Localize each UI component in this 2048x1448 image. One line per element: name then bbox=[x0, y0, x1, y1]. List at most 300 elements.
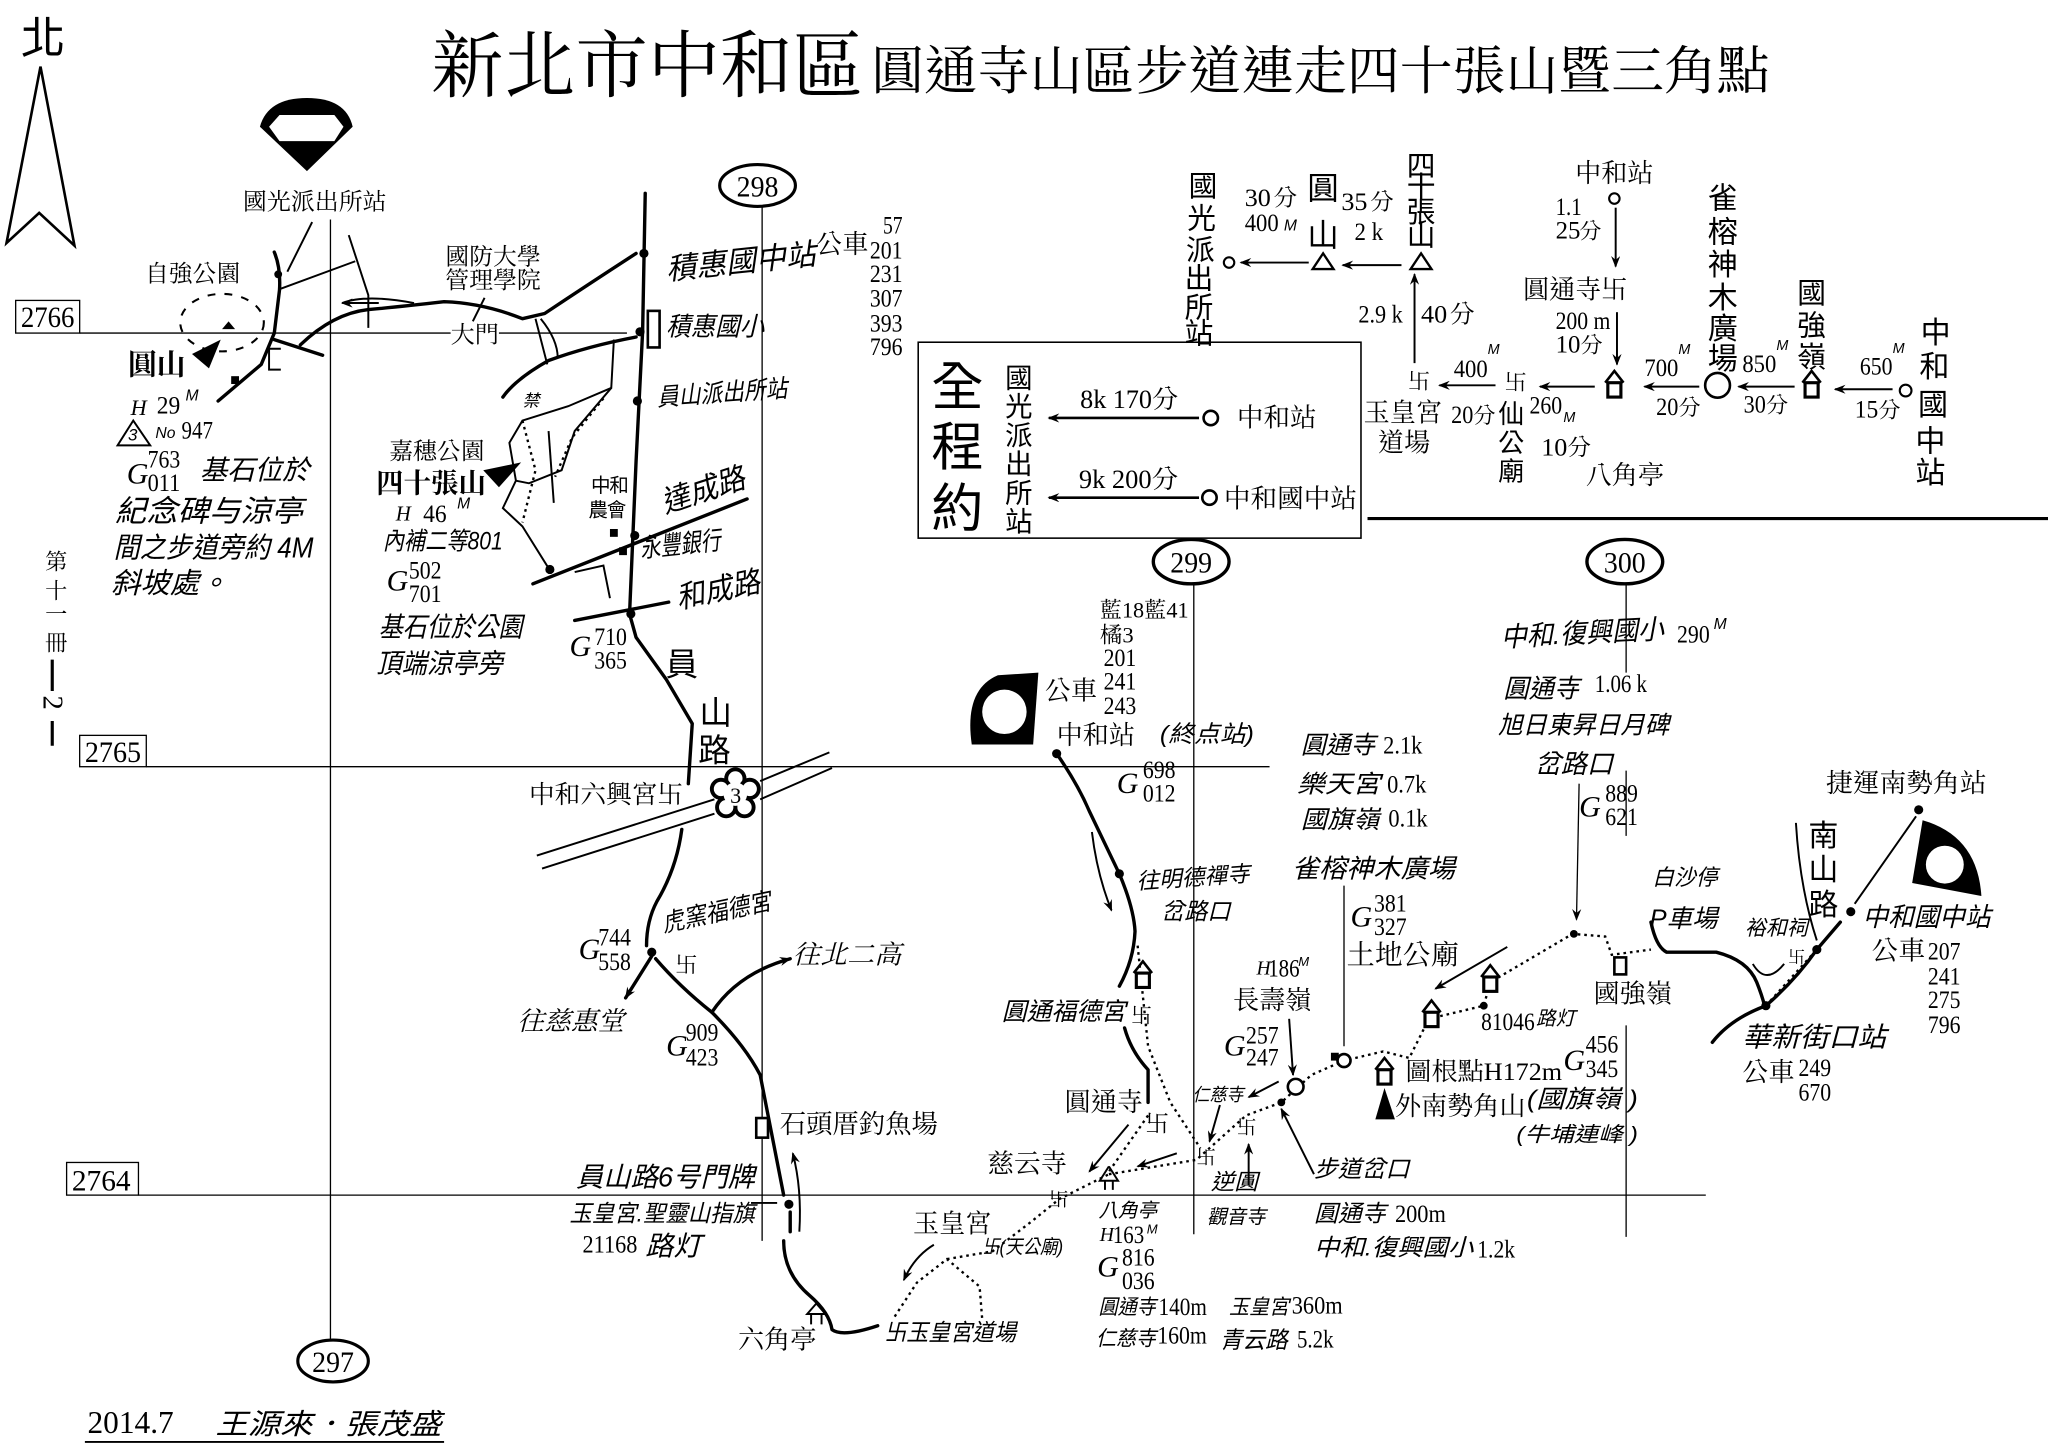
bus routes at Zhonghe station: 藍18藍41 bbox=[1100, 597, 1189, 622]
panel: route flow diagram: 國 bbox=[1189, 171, 1217, 203]
panel: total walking time box: 出 bbox=[1005, 448, 1032, 479]
panel: route flow diagram: 站 bbox=[1915, 456, 1945, 489]
panel: route flow diagram: 分 bbox=[1273, 185, 1297, 212]
labels: Fuxing elementary school approach: 621 bbox=[1605, 804, 1638, 831]
peak: Yuanshan with triangulation notes bbox=[111, 340, 314, 600]
labels: Nanshijiao area: 公車 bbox=[1872, 936, 1925, 965]
road labels, south-west section: 虎窯福德宮 bbox=[659, 887, 776, 938]
labels along the ridge trail: G bbox=[1224, 1030, 1246, 1063]
credits: date and authors: 2014.7 bbox=[88, 1405, 174, 1440]
panel: route flow diagram: 10 bbox=[1541, 435, 1567, 462]
route: Yuanshan Road north-south bbox=[503, 193, 747, 946]
panel: route flow diagram: 200 m bbox=[1556, 308, 1610, 335]
labels along the ridge trail: 186 bbox=[1268, 956, 1300, 983]
panel: route flow diagram: 分 bbox=[1473, 403, 1495, 428]
labels: Fuxing elementary school approach: 290 bbox=[1677, 621, 1710, 648]
panel: route flow diagram: 分 bbox=[1878, 398, 1900, 423]
road labels, north section: G bbox=[569, 630, 591, 663]
panel: route flow diagram: 400 bbox=[1454, 356, 1488, 383]
panel: route flow diagram: 張 bbox=[1407, 197, 1435, 229]
panel: route flow diagram: 光 bbox=[1187, 203, 1216, 235]
panel: total walking time box: 全 bbox=[931, 359, 984, 417]
panel: total walking time box: 派 bbox=[1005, 419, 1032, 450]
panel: route flow diagram: 中 bbox=[1921, 317, 1951, 350]
label: National Defense University college: 管理學院 bbox=[445, 267, 541, 294]
labels along the ridge trail: 81046 bbox=[1481, 1009, 1535, 1036]
side volume label: 第 bbox=[45, 549, 67, 574]
road labels, north section: 會 bbox=[607, 500, 627, 522]
label: National Defense University college bbox=[445, 243, 541, 294]
road labels, north section: 積惠國中站 bbox=[664, 238, 821, 287]
octagonal pavilion notes: G bbox=[1097, 1250, 1119, 1283]
labels along the ridge trail: 圓通寺 bbox=[1314, 1200, 1389, 1226]
grid lines with coordinate labels: 2766 bbox=[21, 301, 74, 334]
route: Baishating car park to Nanshijiao bbox=[1651, 805, 1923, 1042]
panel: route flow diagram: 分 bbox=[1370, 188, 1394, 215]
panel: route flow diagram bbox=[1185, 151, 2048, 519]
labels: Nanshijiao area: 路 bbox=[1808, 889, 1838, 922]
octagonal pavilion notes: 八角亭 bbox=[1098, 1200, 1161, 1222]
panel: route flow diagram: 分 bbox=[1579, 219, 1601, 244]
octagonal pavilion notes: 163 bbox=[1113, 1222, 1144, 1249]
peak: Yuanshan with triangulation notes: No bbox=[155, 425, 176, 442]
panel: total walking time box: 所 bbox=[1005, 477, 1032, 508]
bus routes at Zhonghe station: 698 bbox=[1143, 757, 1176, 784]
panel: route flow diagram: 派 bbox=[1186, 235, 1215, 267]
peak: Yuanshan with triangulation notes: 紀念碑与涼亭 bbox=[115, 496, 307, 529]
panel: total walking time box: 程 bbox=[931, 419, 984, 477]
road labels, south-west section: 往北二高 bbox=[793, 940, 905, 969]
panel: route flow diagram: 雀 bbox=[1708, 182, 1738, 215]
labels: Nanshijiao area: 249 bbox=[1799, 1055, 1831, 1082]
side volume label: 十 bbox=[45, 578, 67, 603]
labels along the ridge trail: 圖根點H172m bbox=[1405, 1058, 1562, 1086]
labels: Nanshijiao area: 796 bbox=[1928, 1012, 1960, 1039]
road labels, north section: 231 bbox=[870, 261, 903, 288]
peak: Yuanshan with triangulation notes: G bbox=[127, 458, 149, 491]
panel: route flow diagram: 30 bbox=[1744, 391, 1766, 418]
road labels, north section: 中 bbox=[591, 475, 611, 497]
labels along the ridge trail: 中和.復興國小 bbox=[1314, 1234, 1474, 1260]
panel: route flow diagram: 分 bbox=[1678, 395, 1701, 420]
bus routes at Zhonghe station: (終点站) bbox=[1160, 721, 1254, 747]
peak: Sishizhangshan with triangulation notes: 701 bbox=[409, 581, 441, 608]
bus routes at Zhonghe station: 岔路口 bbox=[1161, 899, 1232, 925]
road labels, north section: 達成路 bbox=[657, 461, 752, 520]
panel: route flow diagram: M bbox=[1284, 217, 1298, 234]
road labels, south-west section: 石頭厝釣魚場 bbox=[780, 1110, 938, 1139]
labels along the ridge trail bbox=[1192, 732, 1638, 1263]
labels: Nanshijiao area bbox=[1650, 769, 1994, 1107]
labels: Fuxing elementary school approach: G bbox=[1579, 791, 1601, 824]
panel: route flow diagram: 國 bbox=[1918, 388, 1948, 421]
peak: Sishizhangshan with triangulation notes: 四十張山 bbox=[376, 468, 486, 498]
labels along the ridge trail: 247 bbox=[1246, 1044, 1279, 1071]
peak: Yuanshan with triangulation notes: 763 bbox=[148, 446, 180, 473]
labels along the ridge trail: 仁慈寺 bbox=[1192, 1084, 1246, 1105]
panel: route flow diagram: 20 bbox=[1656, 394, 1678, 421]
panel: route flow diagram: 850 bbox=[1742, 351, 1776, 378]
labels along the ridge trail: 0.1k bbox=[1388, 805, 1428, 832]
peak: Sishizhangshan with triangulation notes: 46 bbox=[423, 501, 447, 528]
labels: Nanshijiao area: 公車 bbox=[1742, 1058, 1795, 1087]
credits: date and authors: 王源來．張茂盛 bbox=[216, 1409, 445, 1441]
panel: route flow diagram: 20 bbox=[1451, 402, 1473, 429]
label: Zhonghe Liuxing Temple: 中和六興宮卐 bbox=[529, 781, 683, 809]
road labels, south-west section: 744 bbox=[598, 924, 631, 951]
labels along the ridge trail: 卐 bbox=[1237, 1117, 1256, 1139]
labels along the ridge trail: 雀榕神木廣場 bbox=[1292, 854, 1458, 884]
labels: Fuxing elementary school approach: 889 bbox=[1605, 781, 1638, 808]
labels along the ridge trail: 257 bbox=[1246, 1022, 1279, 1049]
icon: Nanshijiao MRT marker bbox=[1912, 820, 1981, 896]
panel: route flow diagram: 30 bbox=[1245, 185, 1271, 212]
bus routes at Zhonghe station bbox=[987, 597, 1254, 1211]
road labels, north section: 員山派出所站 bbox=[656, 376, 791, 412]
labels along the ridge trail: 觀音寺 bbox=[1207, 1206, 1269, 1228]
label: Ziqiang park: 自強公園 bbox=[145, 260, 240, 287]
panel: total walking time box: 8k 170分 bbox=[1080, 385, 1178, 414]
octagonal pavilion notes: 140m bbox=[1159, 1294, 1207, 1321]
road labels, north section: 農 bbox=[588, 500, 608, 522]
panel: route flow diagram: 四 bbox=[1407, 151, 1435, 183]
labels: Nanshijiao area: 670 bbox=[1799, 1080, 1831, 1107]
labels along the ridge trail: 逆圓 bbox=[1211, 1170, 1261, 1195]
bus routes at Zhonghe station: 卐 bbox=[1131, 1004, 1152, 1028]
panel: route flow diagram: 分 bbox=[1450, 300, 1475, 328]
title bbox=[431, 26, 1770, 107]
panel: route flow diagram: 八角亭 bbox=[1586, 461, 1664, 490]
road labels, north section: 山 bbox=[699, 693, 732, 730]
peak: Sishizhangshan with triangulation notes: M bbox=[457, 496, 471, 513]
peak: Sishizhangshan with triangulation notes bbox=[376, 438, 526, 679]
panel: route flow diagram: 分 bbox=[1567, 434, 1591, 461]
labels: Nanshijiao area: P車場 bbox=[1650, 906, 1721, 933]
panel: route flow diagram: 國 bbox=[1797, 278, 1826, 310]
bus routes at Zhonghe station: G bbox=[1117, 767, 1139, 800]
labels: Nanshijiao area: 275 bbox=[1928, 987, 1960, 1014]
panel: total walking time box: 國 bbox=[1005, 362, 1032, 393]
bus routes at Zhonghe station: 圓通福德宮 bbox=[1002, 999, 1129, 1026]
labels along the ridge trail: M bbox=[1298, 954, 1309, 969]
labels: Nanshijiao area: 中和國中站 bbox=[1863, 902, 1994, 932]
panel: route flow diagram: 25 bbox=[1556, 218, 1580, 245]
panel: total walking time box: 光 bbox=[1005, 391, 1032, 422]
road labels, south-west section: 玉皇宮 bbox=[913, 1209, 991, 1238]
grid lines with coordinate labels: 298 bbox=[737, 170, 778, 203]
panel: route flow diagram: 1.1 bbox=[1556, 194, 1582, 221]
bus routes at Zhonghe station: 201 bbox=[1104, 645, 1136, 672]
panel: total walking time box: 中和站 bbox=[1237, 403, 1317, 432]
panel: route flow diagram: 廣 bbox=[1708, 313, 1738, 346]
labels: Nanshijiao area: 裕和祠 bbox=[1745, 917, 1811, 940]
label: main gate: 大門 bbox=[451, 322, 499, 349]
road labels, south-west section: 路灯 bbox=[645, 1231, 706, 1262]
labels along the ridge trail: 456 bbox=[1586, 1031, 1618, 1058]
panel: route flow diagram: 分 bbox=[1580, 332, 1603, 357]
road labels, south-west section: G bbox=[666, 1030, 688, 1063]
bus routes at Zhonghe station: 241 bbox=[1104, 668, 1136, 695]
panel: route flow diagram: 中 bbox=[1915, 425, 1945, 458]
side volume label: 一 bbox=[45, 601, 67, 626]
peak: Sishizhangshan with triangulation notes: 嘉穗公園 bbox=[389, 438, 485, 465]
octagonal pavilion notes: 360m bbox=[1292, 1293, 1343, 1320]
octagonal pavilion notes: 036 bbox=[1122, 1268, 1155, 1295]
panel: route flow diagram: 仙 bbox=[1498, 399, 1524, 429]
labels: Nanshijiao area: 山 bbox=[1808, 853, 1838, 886]
route: Yuanshan Road south to Yuhuang temple bbox=[626, 948, 878, 1333]
labels along the ridge trail: 2.1k bbox=[1383, 732, 1423, 759]
panel: route flow diagram: 廟 bbox=[1498, 457, 1524, 487]
bus routes at Zhonghe station: 卐 bbox=[1049, 1189, 1068, 1211]
octagonal pavilion notes bbox=[1096, 1200, 1343, 1354]
octagonal pavilion notes: 圓通寺 bbox=[1098, 1296, 1159, 1319]
labels along the ridge trail: 路灯 bbox=[1536, 1008, 1579, 1030]
title: 新北市中和區 bbox=[431, 26, 865, 107]
panel: route flow diagram: 40 bbox=[1421, 301, 1447, 328]
road labels, north section: 393 bbox=[870, 310, 903, 337]
road labels, south-west section: 玉皇宮.聖靈山指旗 bbox=[569, 1200, 758, 1226]
octagonal pavilion notes: 青云路 bbox=[1220, 1327, 1290, 1353]
labels along the ridge trail: 381 bbox=[1374, 890, 1407, 917]
road labels, south-west section: 六角亭 bbox=[738, 1326, 816, 1355]
labels along the ridge trail: 國旗嶺 bbox=[1301, 807, 1383, 834]
panel: route flow diagram: 出 bbox=[1185, 264, 1213, 296]
road labels, north section: 和成路 bbox=[673, 565, 766, 616]
credits: date and authors bbox=[85, 1405, 445, 1442]
panel: route flow diagram: 10 bbox=[1556, 331, 1580, 358]
road labels, north section bbox=[569, 212, 903, 768]
road labels, north section: 201 bbox=[870, 237, 903, 264]
labels along the ridge trail: 200m bbox=[1395, 1201, 1446, 1228]
road labels, north section: 365 bbox=[594, 647, 627, 674]
peak: Yuanshan with triangulation notes: 3 bbox=[128, 425, 138, 444]
panel: route flow diagram: 圓 bbox=[1307, 171, 1339, 206]
peak: Yuanshan with triangulation notes: 947 bbox=[182, 418, 213, 445]
highway interchange: 3 bbox=[730, 783, 741, 808]
peak: Yuanshan with triangulation notes: 斜坡處。 bbox=[111, 568, 229, 600]
road labels, north section: 57 bbox=[883, 212, 903, 239]
road labels, north section: 永豐銀行 bbox=[638, 525, 725, 564]
labels along the ridge trail: 樂天宮 bbox=[1297, 771, 1384, 798]
labels along the ridge trail: 0.7k bbox=[1387, 771, 1427, 798]
peak: Yuanshan with triangulation notes: 基石位於 bbox=[200, 455, 313, 486]
panel: route flow diagram: 圓通寺卐 bbox=[1523, 275, 1627, 304]
labels along the ridge trail: 圓通寺 bbox=[1301, 732, 1380, 759]
labels: Fuxing elementary school approach: 國強嶺 bbox=[1593, 979, 1674, 1008]
road labels, north section: 和 bbox=[609, 475, 629, 497]
panel: route flow diagram: 35 bbox=[1341, 189, 1368, 216]
labels: Fuxing elementary school approach: 1.06 k bbox=[1595, 671, 1648, 698]
peak: Sishizhangshan with triangulation notes: G bbox=[387, 565, 409, 598]
route: Zhonghe station to Yuantong temple bbox=[895, 749, 1200, 1319]
road labels, north section: 積惠國小 bbox=[666, 312, 765, 342]
labels along the ridge trail: G bbox=[1563, 1044, 1585, 1077]
labels: Nanshijiao area: 白沙停 bbox=[1652, 865, 1721, 890]
labels: Nanshijiao area: 卐 bbox=[1788, 948, 1805, 967]
road labels, south-west section: 卐玉皇宮道場 bbox=[884, 1319, 1019, 1345]
icon: Guoguang police station bus stop marker bbox=[260, 98, 353, 171]
panel: route flow diagram: 2 k bbox=[1354, 219, 1384, 246]
highway interchange bbox=[537, 752, 832, 869]
panel: route flow diagram: 木 bbox=[1708, 281, 1738, 314]
north arrow: 北 bbox=[21, 15, 65, 64]
panel: route flow diagram: 所 bbox=[1185, 292, 1213, 324]
title: 圓通寺山區步道連走四十張山暨三角點 bbox=[871, 43, 1770, 101]
panel: route flow diagram: 道場 bbox=[1378, 428, 1430, 457]
bus routes at Zhonghe station: 橘3 bbox=[1100, 622, 1134, 647]
panel: total walking time box: 9k 200分 bbox=[1079, 465, 1178, 494]
panel: route flow diagram: 260 bbox=[1529, 393, 1562, 420]
panel: route flow diagram: 神 bbox=[1708, 249, 1738, 282]
road labels, south-west section: G bbox=[579, 933, 601, 966]
labels: Fuxing elementary school approach: 岔路口 bbox=[1535, 749, 1615, 779]
road labels, south-west section: 卐 bbox=[675, 953, 697, 978]
label: Guoguang police station: 國光派出所站 bbox=[243, 188, 387, 215]
panel: route flow diagram: 山 bbox=[1407, 220, 1435, 252]
panel: route flow diagram: 十 bbox=[1407, 172, 1435, 204]
road labels, south-west section: 558 bbox=[598, 949, 631, 976]
labels along the ridge trail: 1.2k bbox=[1477, 1236, 1516, 1263]
labels along the ridge trail: 345 bbox=[1586, 1056, 1618, 1083]
octagonal pavilion notes: 仁慈寺 bbox=[1096, 1327, 1159, 1350]
panel: route flow diagram: M bbox=[1776, 338, 1788, 354]
trail: ridge walk east from Renci temple to Guoqiang ridge bbox=[1109, 784, 1651, 1185]
Jiasui park trails bbox=[503, 340, 614, 568]
road labels, south-west section: 21168 bbox=[583, 1231, 637, 1258]
road labels, north section: 796 bbox=[870, 334, 903, 361]
panel: route flow diagram: 山 bbox=[1307, 218, 1339, 253]
panel: route flow diagram: M bbox=[1563, 410, 1575, 426]
panel: total walking time box: 站 bbox=[1005, 506, 1032, 537]
panel: route flow diagram: 卐 bbox=[1505, 370, 1527, 395]
bus routes at Zhonghe station: 往明德禪寺 bbox=[1135, 861, 1254, 894]
road labels, south-west section: 卐(天公廟) bbox=[982, 1236, 1063, 1258]
labels: Fuxing elementary school approach: 旭日東昇日月碑 bbox=[1498, 713, 1672, 740]
road labels, south-west section: 909 bbox=[686, 1020, 718, 1047]
side volume label: 冊 bbox=[45, 630, 67, 655]
panel: route flow diagram: 和 bbox=[1919, 351, 1949, 384]
labels along the ridge trail: 卐 bbox=[1196, 1147, 1216, 1169]
octagonal pavilion notes: 816 bbox=[1122, 1244, 1155, 1271]
panel: route flow diagram: 400 bbox=[1245, 210, 1279, 237]
grid lines with coordinate labels: 297 bbox=[312, 1346, 354, 1379]
labels along the ridge trail: (牛埔連峰 ) bbox=[1516, 1124, 1638, 1147]
panel: route flow diagram: 中和站 bbox=[1575, 159, 1654, 188]
north arrow bbox=[7, 15, 74, 246]
road labels, south-west section: 423 bbox=[686, 1044, 718, 1071]
peak: Yuanshan with triangulation notes: 29 bbox=[157, 393, 180, 420]
peak: Yuanshan with triangulation notes: 011 bbox=[148, 470, 180, 497]
road labels, north section: 路 bbox=[698, 731, 731, 768]
panel: route flow diagram: 700 bbox=[1644, 355, 1678, 382]
road labels, north section: 員 bbox=[665, 645, 698, 682]
panel: route flow diagram: 卐 bbox=[1408, 369, 1430, 394]
bus routes at Zhonghe station: 卐 bbox=[1145, 1112, 1169, 1138]
peak: Yuanshan with triangulation notes: 間之步道旁約 4M bbox=[114, 533, 314, 565]
panel: route flow diagram: M bbox=[1678, 342, 1690, 358]
grid lines with coordinate labels: 300 bbox=[1604, 546, 1646, 579]
panel: route flow diagram: 榕 bbox=[1708, 216, 1738, 249]
panel: route flow diagram: 2.9 k bbox=[1358, 301, 1403, 328]
road labels, north section: 公車 bbox=[816, 230, 869, 259]
panel: route flow diagram: 玉皇宮 bbox=[1364, 398, 1442, 427]
side volume label bbox=[36, 549, 68, 746]
labels: Fuxing elementary school approach bbox=[1498, 613, 1728, 1008]
labels: Fuxing elementary school approach: M bbox=[1714, 616, 1728, 633]
peak: Sishizhangshan with triangulation notes: H bbox=[395, 501, 413, 525]
panel: route flow diagram: 650 bbox=[1860, 354, 1893, 381]
labels: Nanshijiao area: 華新街口站 bbox=[1742, 1022, 1890, 1053]
grid lines with coordinate labels: 2764 bbox=[72, 1164, 131, 1197]
road labels, south-west section: 往慈惠堂 bbox=[517, 1007, 628, 1036]
labels: Nanshijiao area: 南 bbox=[1808, 819, 1838, 852]
peak: Yuanshan with triangulation notes: H bbox=[130, 395, 149, 420]
labels: Nanshijiao area: 241 bbox=[1928, 963, 1960, 990]
grid lines with coordinate labels bbox=[16, 165, 1706, 1382]
panel: route flow diagram: 15 bbox=[1855, 397, 1878, 424]
peak: Yuanshan with triangulation notes: M bbox=[185, 387, 199, 404]
bus routes at Zhonghe station: 慈云寺 bbox=[987, 1149, 1067, 1178]
roads around Yuanshan bbox=[180, 222, 636, 401]
road labels, south-west section: 員山路6号門牌 bbox=[576, 1161, 758, 1192]
panel: route flow diagram: 場 bbox=[1708, 343, 1738, 376]
road labels, south-west section bbox=[517, 887, 1063, 1355]
road labels, north section: 710 bbox=[594, 624, 627, 651]
labels along the ridge trail: 327 bbox=[1374, 914, 1407, 941]
labels along the ridge trail: 外南勢角山 bbox=[1395, 1092, 1526, 1121]
bus routes at Zhonghe station: 243 bbox=[1104, 693, 1136, 720]
peak: Sishizhangshan with triangulation notes: 基石位於公園 bbox=[379, 611, 526, 642]
octagonal pavilion notes: M bbox=[1147, 1222, 1158, 1237]
labels: Nanshijiao area: 捷運南勢角站 bbox=[1826, 769, 1987, 798]
peak: Sishizhangshan with triangulation notes: 內補二等801 bbox=[383, 528, 503, 556]
labels along the ridge trail: 土地公廟 bbox=[1347, 940, 1459, 970]
panel: total walking time box: 中和國中站 bbox=[1224, 484, 1357, 513]
Jiasui park trails: 禁 bbox=[522, 391, 541, 410]
bus routes at Zhonghe station: 圓通寺 bbox=[1064, 1088, 1143, 1117]
panel: route flow diagram: 站 bbox=[1185, 318, 1213, 350]
grid lines with coordinate labels: 2765 bbox=[85, 736, 141, 769]
peak: Sishizhangshan with triangulation notes: 頂端涼亭旁 bbox=[376, 648, 506, 679]
panel: route flow diagram: 嶺 bbox=[1797, 342, 1826, 374]
label: National Defense University college: 國防大學 bbox=[445, 243, 541, 270]
panel: route flow diagram: 分 bbox=[1766, 392, 1788, 417]
labels along the ridge trail: 步道岔口 bbox=[1314, 1156, 1411, 1182]
labels: Nanshijiao area: 207 bbox=[1928, 939, 1960, 966]
panel: route flow diagram: 強 bbox=[1797, 311, 1826, 343]
icon: Zhonghe station MRT marker bbox=[970, 673, 1038, 745]
labels along the ridge trail: H bbox=[1255, 959, 1272, 980]
panel: route flow diagram: M bbox=[1893, 341, 1905, 357]
road labels, north section: 307 bbox=[870, 286, 903, 313]
bus routes at Zhonghe station: 中和站 bbox=[1057, 721, 1135, 750]
labels: Fuxing elementary school approach: 圓通寺 bbox=[1503, 673, 1583, 703]
labels along the ridge trail: G bbox=[1351, 900, 1373, 933]
panel: total walking time box: 約 bbox=[931, 480, 984, 538]
octagonal pavilion notes: 玉皇宮 bbox=[1229, 1296, 1292, 1319]
bus routes at Zhonghe station: 012 bbox=[1143, 781, 1176, 808]
labels: Fuxing elementary school approach: 中和.復興國小 bbox=[1500, 613, 1665, 653]
labels along the ridge trail: (國旗嶺 ) bbox=[1527, 1086, 1638, 1113]
side volume label: 2 bbox=[36, 696, 68, 710]
panel: route flow diagram: 公 bbox=[1498, 428, 1524, 458]
octagonal pavilion notes: 5.2k bbox=[1297, 1327, 1334, 1354]
peak: Yuanshan with triangulation notes: 圓山 bbox=[128, 350, 185, 382]
labels along the ridge trail: 長壽嶺 bbox=[1233, 986, 1313, 1015]
panel: route flow diagram: M bbox=[1488, 342, 1500, 358]
bus routes at Zhonghe station: 公車 bbox=[1045, 676, 1097, 705]
